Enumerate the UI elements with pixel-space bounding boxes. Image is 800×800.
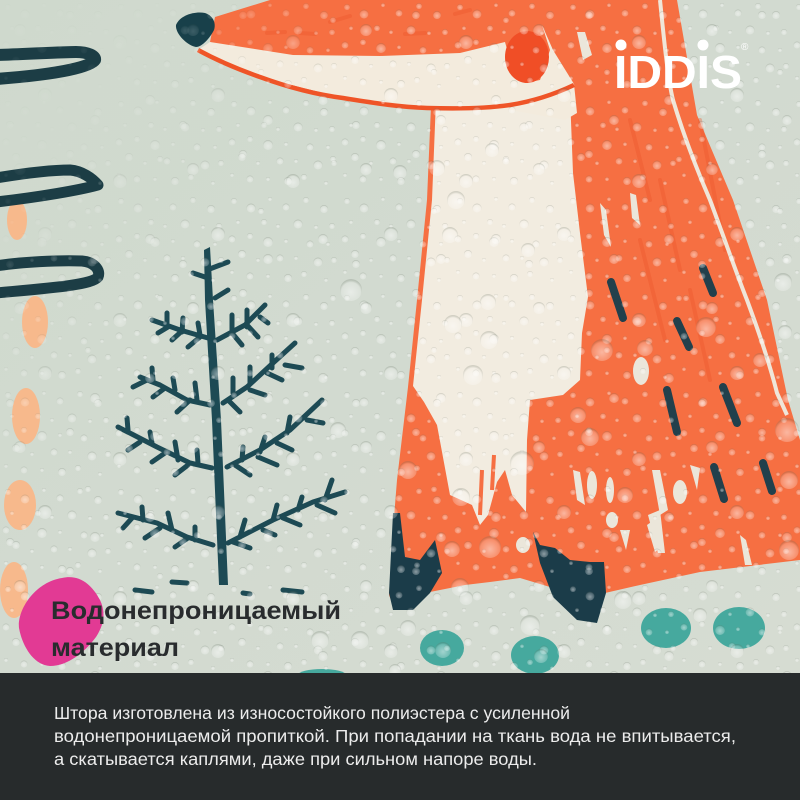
description text: водонепроницаемой пропиткой. При попадании на ткань вода не впитывается, — [54, 726, 736, 746]
fox body — [210, 0, 800, 610]
fox muzzle — [198, 25, 577, 120]
IDDIS logo: ® — [741, 42, 749, 53]
fox fur slivers — [516, 32, 752, 565]
fox left paw — [389, 513, 442, 610]
fox chest orange strands — [480, 455, 494, 515]
heading: материал — [51, 634, 179, 662]
pink blob accent — [19, 577, 103, 666]
large water droplets — [311, 143, 799, 676]
IDDIS logo: IDDIS — [614, 46, 742, 98]
description text — [54, 703, 736, 769]
heading — [51, 597, 341, 662]
fir tree — [118, 247, 345, 594]
dark description panel — [0, 673, 800, 800]
fox cheek — [505, 31, 549, 83]
fox darker fur streaks — [267, 10, 725, 380]
fox dark fur stripes — [611, 268, 772, 499]
fox white outline streak — [660, 0, 787, 415]
teal paw prints — [298, 607, 765, 681]
mushroom outlines and peach stems — [0, 52, 99, 618]
fox — [176, 0, 800, 623]
fox chin line — [198, 50, 574, 108]
fox nose — [176, 12, 215, 47]
fox white chest — [413, 95, 588, 525]
fox right paw — [533, 532, 606, 623]
description text: а скатывается каплями, даже при сильном напоре воды. — [54, 749, 537, 769]
heading: Водонепроницаемый — [51, 597, 341, 625]
description text: Штора изготовлена из износостойкого полиэстера с усиленной — [54, 703, 570, 723]
